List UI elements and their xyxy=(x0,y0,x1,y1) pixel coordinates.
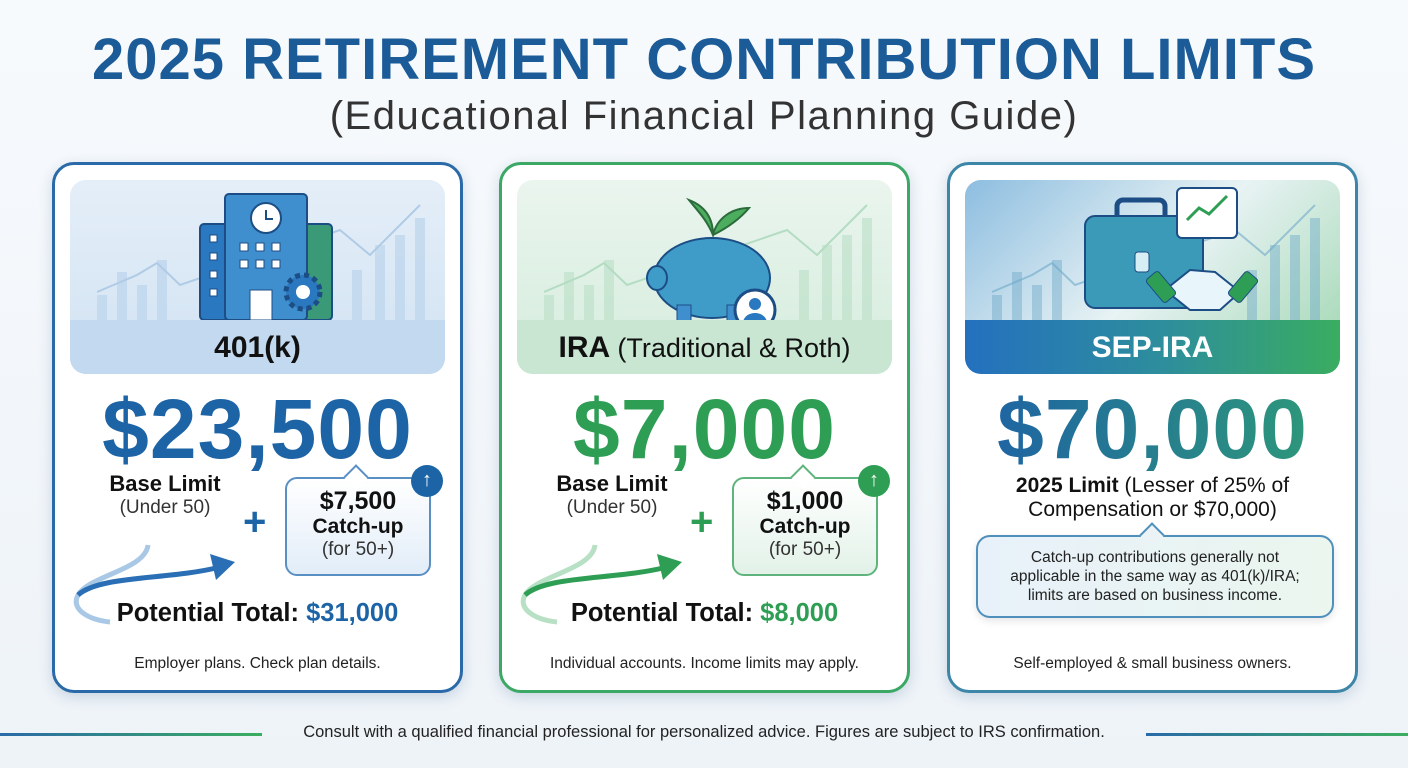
note: Individual accounts. Income limits may apply. xyxy=(550,655,859,672)
header: 401(k) xyxy=(70,180,445,374)
catch-up box: (for 50+) xyxy=(769,539,841,560)
potential total: Potential Total: $8,000 xyxy=(571,599,838,627)
base limit xyxy=(109,471,221,518)
arrow xyxy=(520,544,682,624)
footer disclaimer: Consult with a qualified financial professional for personalized advice. Figures are subject to IRS confirmation. xyxy=(303,723,1105,741)
footer disclaimer xyxy=(0,723,1408,741)
header: SEP-IRA: SEP-IRA xyxy=(1092,331,1213,364)
header: IRA: IRA (Traditional & Roth) xyxy=(558,331,850,364)
base limit: (Under 50) xyxy=(567,497,657,518)
catch-up box: $7,500 xyxy=(320,487,396,515)
subtitle: (Educational Financial Planning Guide) xyxy=(330,94,1078,138)
potential total: Potential Total: $31,000 xyxy=(117,599,398,627)
plus sign: + xyxy=(690,500,713,544)
catch-up box: (for 50+) xyxy=(322,539,394,560)
header: SEP-IRA xyxy=(965,180,1340,374)
callout: catch-up note: applicable in the same way as 401(k)/IRA; xyxy=(1010,568,1300,585)
icon: building xyxy=(200,194,332,320)
big number: $7,000: $7,000 xyxy=(573,382,836,476)
limit description: Compensation or $70,000) xyxy=(1028,498,1277,521)
plus sign: + xyxy=(243,500,266,544)
base limit xyxy=(556,471,668,518)
note: Employer plans. Check plan details. xyxy=(134,655,381,672)
catch-up box: Catch-up xyxy=(312,515,404,538)
catch-up box xyxy=(732,477,878,576)
base limit: (Under 50) xyxy=(120,497,210,518)
base limit: Base Limit xyxy=(109,471,221,496)
catch-up box xyxy=(285,477,431,576)
icon: briefcase and handshake xyxy=(1085,188,1259,310)
panel: 401(k) xyxy=(52,162,463,693)
catch-up box: ↑ xyxy=(422,469,432,491)
icon: piggy bank xyxy=(647,200,775,330)
panel: IRA xyxy=(499,162,910,693)
big number: $70,000: $70,000 xyxy=(997,382,1308,476)
limit description: 2025 Limit (Lesser of 25% of xyxy=(1016,474,1289,497)
limit description xyxy=(1016,474,1290,521)
note: Self-employed & small business owners. xyxy=(1013,655,1292,672)
catch-up box: Catch-up xyxy=(760,515,850,538)
callout: catch-up note: Catch-up contributions generally not xyxy=(1031,549,1279,566)
arrow xyxy=(74,544,235,624)
header: IRA xyxy=(517,180,892,374)
title: 2025 RETIREMENT CONTRIBUTION LIMITS xyxy=(92,27,1316,92)
catch-up box: ↑ xyxy=(869,469,879,491)
callout: catch-up note xyxy=(976,535,1334,618)
big number: $23,500: $23,500 xyxy=(102,382,413,476)
callout: catch-up note: limits are based on business income. xyxy=(1028,587,1282,604)
header: 401(k): 401(k) xyxy=(214,331,301,364)
catch-up box: $1,000 xyxy=(767,487,843,515)
panel: SEP-IRA xyxy=(947,162,1358,693)
base limit: Base Limit xyxy=(556,471,668,496)
